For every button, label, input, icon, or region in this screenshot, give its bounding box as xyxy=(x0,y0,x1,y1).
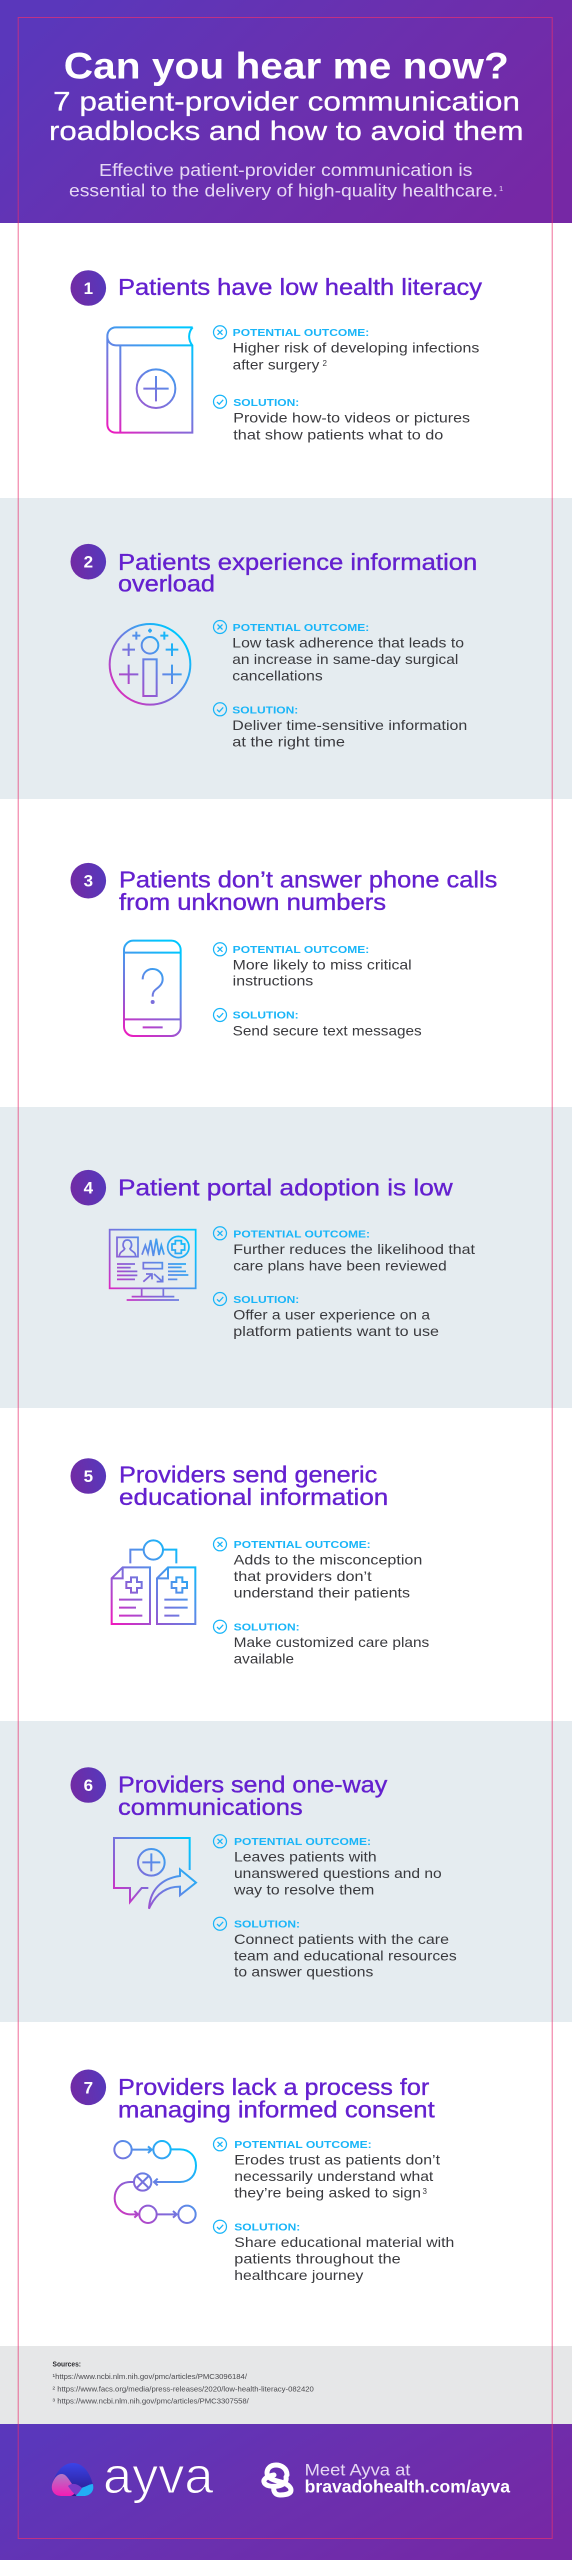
solution 6: team and educational resources xyxy=(234,1947,457,1963)
potential outcome 2: Low task adherence that leads to xyxy=(232,635,464,651)
panel: roadblock 1 xyxy=(0,223,572,498)
heading 7: managing informed consent xyxy=(118,2097,435,2123)
footer banner xyxy=(0,2424,572,2560)
number badge 3: 3 xyxy=(84,872,93,891)
potential outcome 1: Higher risk of developing infections xyxy=(233,340,479,356)
potential outcome 1: after surgery xyxy=(233,356,319,372)
potential outcome 6: Leaves patients with xyxy=(234,1849,377,1865)
number badge 6: 6 xyxy=(84,1776,93,1795)
number badge 2: 2 xyxy=(84,553,93,572)
solution 1: that show patients what to do xyxy=(233,426,444,442)
subtitle: 7 patient-provider communication xyxy=(53,87,520,117)
potential outcome 6: POTENTIAL OUTCOME: xyxy=(234,1836,371,1848)
heading 3: from unknown numbers xyxy=(119,889,386,915)
call to action: Meet Ayva at xyxy=(305,2461,411,2480)
solution 7 xyxy=(214,2220,454,2283)
potential outcome 7 xyxy=(214,2138,440,2200)
solution 1 xyxy=(214,395,470,442)
potential outcome 7: 3 xyxy=(422,2187,428,2196)
heading 6: Providers send one-way xyxy=(118,1771,388,1797)
icon: portal monitor xyxy=(110,1230,196,1300)
solution 7: Share educational material with xyxy=(234,2234,454,2250)
subtitle: roadblocks and how to avoid them xyxy=(49,116,524,146)
potential outcome 3: More likely to miss critical xyxy=(233,956,412,972)
heading 2: overload xyxy=(118,571,215,597)
heading 3: Patients don’t answer phone calls xyxy=(119,866,497,892)
potential outcome 6: way to resolve them xyxy=(233,1881,374,1897)
number badge 1 xyxy=(70,270,106,306)
heading 2 xyxy=(118,549,477,597)
solution 1: Provide how-to videos or pictures xyxy=(233,410,470,426)
potential outcome 4: care plans have been reviewed xyxy=(233,1257,447,1273)
potential outcome 3: instructions xyxy=(233,973,313,989)
solution 2 xyxy=(214,703,467,750)
panel: roadblock 2 xyxy=(0,498,572,799)
sources panel: ¹https://www.ncbi.nlm.nih.gov/pmc/articles/PMC3096184/ xyxy=(52,2372,248,2381)
potential outcome 5: understand their patients xyxy=(234,1584,410,1600)
number badge 4 xyxy=(70,1170,106,1205)
solution 5: available xyxy=(234,1650,294,1666)
solution 5: Make customized care plans xyxy=(234,1634,429,1650)
potential outcome 5: Adds to the misconception xyxy=(234,1552,422,1568)
solution 5: SOLUTION: xyxy=(234,1621,300,1633)
number badge 5 xyxy=(70,1458,106,1494)
potential outcome 4 xyxy=(214,1227,475,1273)
heading 5 xyxy=(119,1461,388,1510)
number badge 2 xyxy=(70,544,106,580)
potential outcome 7: Erodes trust as patients don’t xyxy=(234,2152,440,2168)
icon: smartphone with question mark xyxy=(124,941,181,1036)
bravado health logo mark xyxy=(264,2465,291,2495)
heading 7 xyxy=(118,2074,435,2123)
potential outcome 2: cancellations xyxy=(232,667,323,683)
panel: roadblock 3 xyxy=(0,799,572,1107)
potential outcome 5: that providers don’t xyxy=(234,1568,372,1584)
solution 4 xyxy=(214,1292,439,1339)
number badge 3 xyxy=(70,863,106,898)
solution 3: Send secure text messages xyxy=(233,1022,422,1038)
potential outcome 1: POTENTIAL OUTCOME: xyxy=(233,327,369,339)
solution 3 xyxy=(214,1008,422,1038)
solution 6: Connect patients with the care xyxy=(234,1931,449,1947)
intro text: 1 xyxy=(499,184,503,193)
solution 4: SOLUTION: xyxy=(233,1294,299,1306)
solution 2: SOLUTION: xyxy=(232,704,298,716)
solution 3: SOLUTION: xyxy=(233,1010,299,1022)
sources panel xyxy=(0,2346,572,2424)
heading 1: Patients have low health literacy xyxy=(118,274,483,300)
panel: roadblock 5 xyxy=(0,1408,572,1721)
icon: information circle xyxy=(110,624,190,705)
solution 7: SOLUTION: xyxy=(234,2221,300,2233)
icon: speech bubble with reply arrow xyxy=(114,1838,196,1909)
number badge 7: 7 xyxy=(84,2078,93,2097)
solution 5 xyxy=(214,1620,429,1666)
ayva logo mark xyxy=(52,2463,93,2496)
solution 4: Offer a user experience on a xyxy=(233,1307,430,1323)
icon: consent process flow xyxy=(114,2141,196,2223)
main title: Can you hear me now? xyxy=(64,45,509,86)
subtitle xyxy=(49,87,524,146)
potential outcome 2: an increase in same-day surgical xyxy=(232,651,458,667)
solution 4: platform patients want to use xyxy=(233,1323,439,1339)
header banner xyxy=(0,0,572,223)
number badge 7 xyxy=(70,2070,106,2105)
call to action: bravadohealth.com/ayva xyxy=(305,2477,510,2497)
solution 7: healthcare journey xyxy=(234,2267,363,2283)
heading 5: Providers send generic xyxy=(119,1461,377,1487)
call to action xyxy=(305,2461,510,2497)
intro text xyxy=(69,160,503,201)
potential outcome 6: unanswered questions and no xyxy=(234,1865,442,1881)
icon: medical book xyxy=(107,327,193,433)
potential outcome 1: 2 xyxy=(322,359,328,368)
panel: roadblock 4 xyxy=(0,1107,572,1408)
potential outcome 4: Further reduces the likelihood that xyxy=(233,1241,475,1257)
panel: roadblock 6 xyxy=(0,1721,572,2022)
solution 6: to answer questions xyxy=(234,1964,373,1980)
number badge 4: 4 xyxy=(84,1179,94,1198)
heading 7: Providers lack a process for xyxy=(118,2074,430,2100)
heading 2: Patients experience information xyxy=(118,549,477,575)
heading 5: educational information xyxy=(119,1484,388,1510)
potential outcome 2 xyxy=(214,620,464,683)
potential outcome 7: necessarily understand what xyxy=(234,2168,433,2184)
potential outcome 2: POTENTIAL OUTCOME: xyxy=(233,622,369,634)
solution 1: SOLUTION: xyxy=(233,397,299,409)
heading 6 xyxy=(118,1771,388,1820)
potential outcome 3: POTENTIAL OUTCOME: xyxy=(233,944,369,956)
solution 7: patients throughout the xyxy=(234,2250,401,2266)
panel: roadblock 7 xyxy=(0,2022,572,2346)
potential outcome 7: POTENTIAL OUTCOME: xyxy=(234,2139,372,2151)
potential outcome 4: POTENTIAL OUTCOME: xyxy=(233,1228,370,1240)
potential outcome 5: POTENTIAL OUTCOME: xyxy=(234,1539,371,1551)
number badge 5: 5 xyxy=(84,1467,93,1486)
sources panel: ² https://www.facs.org/media/press-releases/2020/low-health-literacy-082420 xyxy=(52,2384,314,2393)
number badge 1: 1 xyxy=(84,279,93,298)
intro text: essential to the delivery of high-quality healthcare. xyxy=(69,181,498,201)
potential outcome 7: they’re being asked to sign xyxy=(234,2184,421,2200)
solution 2: at the right time xyxy=(232,734,345,750)
potential outcome 6 xyxy=(214,1835,442,1897)
potential outcome 5 xyxy=(214,1538,422,1600)
sources panel: Sources: xyxy=(52,2360,81,2369)
heading 6: communications xyxy=(118,1794,303,1820)
solution 6 xyxy=(214,1917,457,1980)
potential outcome 1 xyxy=(214,326,479,372)
heading 3 xyxy=(119,866,497,915)
solution 6: SOLUTION: xyxy=(234,1918,300,1930)
sources panel: ³ https://www.ncbi.nlm.nih.gov/pmc/articles/PMC3307558/ xyxy=(52,2396,250,2405)
ayva wordmark: ayva xyxy=(103,2447,214,2504)
icon: medical documents xyxy=(112,1540,195,1624)
potential outcome 3 xyxy=(214,943,412,989)
number badge 6 xyxy=(70,1767,106,1803)
intro text: Effective patient-provider communication is xyxy=(99,160,473,180)
heading 4: Patient portal adoption is low xyxy=(118,1174,453,1200)
solution 2: Deliver time-sensitive information xyxy=(232,717,467,733)
